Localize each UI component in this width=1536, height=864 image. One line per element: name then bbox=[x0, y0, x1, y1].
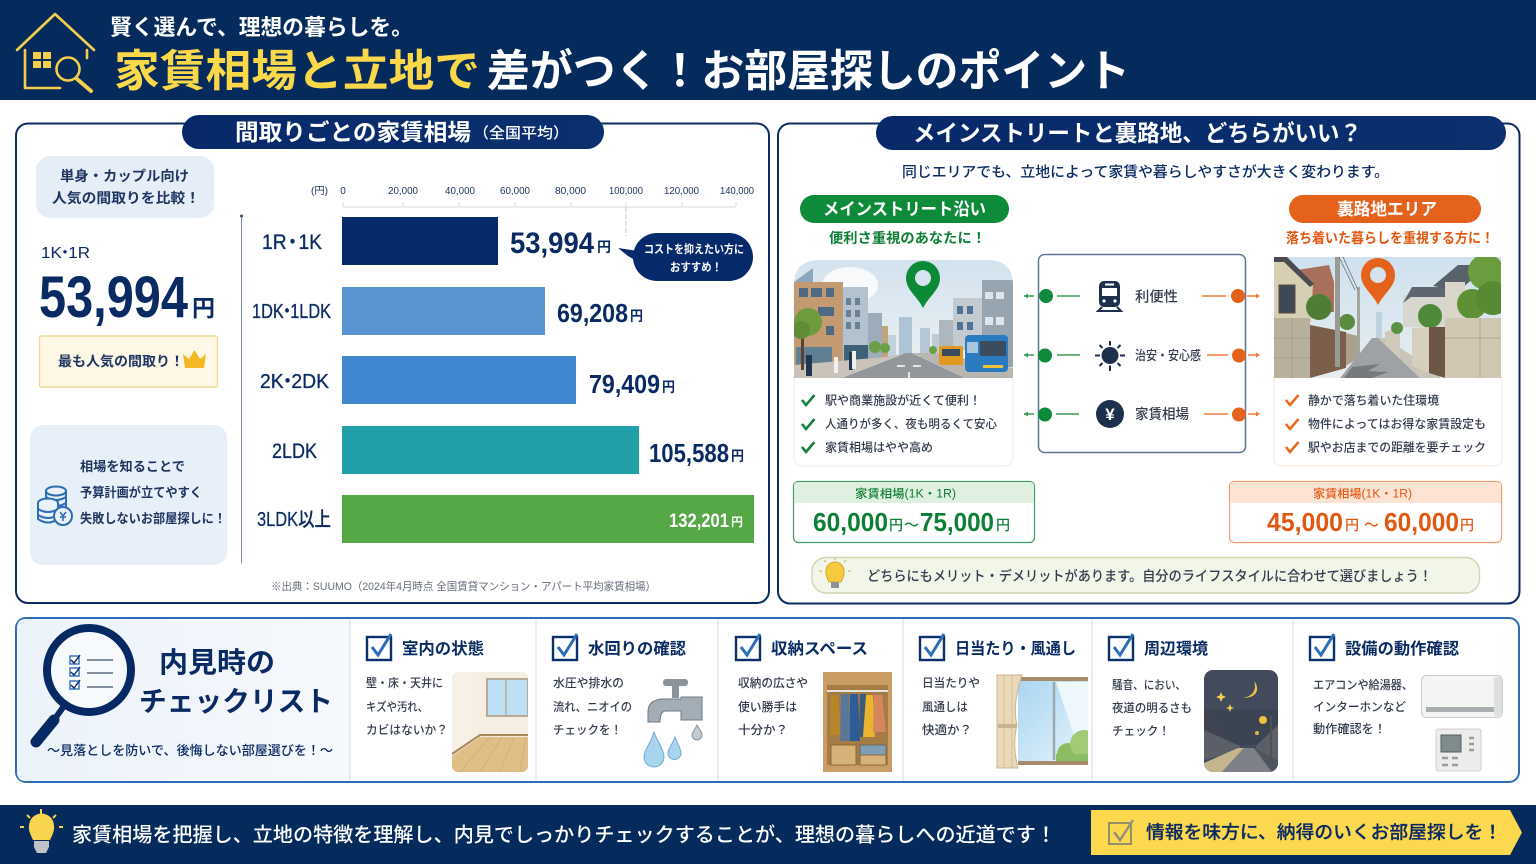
item: surroundings: チェック！ bbox=[1112, 724, 1170, 738]
item: surroundings: 周辺環境 bbox=[1144, 640, 1208, 658]
item: surroundings bbox=[1109, 634, 1278, 772]
row: convenience bbox=[1024, 281, 1260, 311]
checklist title: 内見時の bbox=[159, 647, 275, 678]
rent box: back alley: 円 bbox=[1345, 517, 1359, 533]
item: sunlight and airflow: 日当たり・風通し bbox=[955, 640, 1076, 658]
bar: 1DK・1LDK: 69,208 bbox=[557, 298, 628, 328]
item: water: 水回りの確認 bbox=[588, 639, 686, 658]
item: surroundings: 騒音、におい、 bbox=[1112, 677, 1186, 692]
checklist title: チェックリスト bbox=[139, 686, 333, 717]
icon: crown bbox=[183, 350, 206, 368]
item: water: 水圧や排水の bbox=[553, 675, 624, 690]
label: main street: メインストリート沿い bbox=[823, 200, 986, 219]
bar: 2LDK: 2LDK bbox=[272, 440, 317, 463]
callout: budget note: 相場を知ることで bbox=[80, 459, 185, 474]
rent box: main street: 円 bbox=[996, 517, 1010, 533]
badge: most popular: 最も人気の間取り！ bbox=[58, 353, 184, 369]
list: main street: 人通りが多く、夜も明るくて安心 bbox=[825, 416, 997, 431]
intro text: 同じエリアでも、立地によって家賃や暮らしやすさが大きく変わります。 bbox=[902, 163, 1389, 181]
icon: checkbox bbox=[920, 634, 944, 660]
row: safety: 治安・安心感 bbox=[1135, 348, 1201, 363]
illustration: faucet bbox=[644, 679, 702, 767]
list: back alley: 駅やお店までの距離を要チェック bbox=[1308, 440, 1486, 454]
axis: (円) bbox=[311, 186, 328, 197]
icon: checkbox bbox=[1310, 634, 1334, 660]
callout: recommended for saving cost bbox=[618, 233, 753, 281]
item: storage: 収納の広さや bbox=[738, 675, 808, 690]
item: surroundings: 夜道の明るさも bbox=[1112, 700, 1192, 715]
icon: train bbox=[1098, 281, 1121, 311]
bar: 3LDK以上 bbox=[257, 495, 754, 543]
item: room condition: カビはないか？ bbox=[366, 723, 448, 737]
axis: 140,000 bbox=[720, 186, 754, 197]
item: storage bbox=[736, 634, 892, 772]
card bbox=[1274, 374, 1502, 466]
row: rent: 家賃相場 bbox=[1135, 406, 1189, 422]
main title: 家賃相場と立地で bbox=[114, 47, 480, 96]
panel: rent by floor plan bbox=[16, 115, 769, 603]
checklist intro bbox=[36, 628, 333, 758]
icon: yen coin: ¥ bbox=[1105, 405, 1115, 424]
axis: 80,000 bbox=[555, 186, 586, 197]
banner bbox=[1091, 810, 1522, 855]
item: storage: 収納スペース bbox=[771, 640, 868, 658]
item: room condition: キズや汚れ、 bbox=[366, 699, 428, 714]
item: water: チェックを！ bbox=[553, 723, 622, 737]
item: equipment check bbox=[1310, 634, 1502, 771]
bar: 1R・1K: 53,994 bbox=[510, 227, 594, 260]
highlighted figure: 円 bbox=[192, 295, 215, 321]
illustration: closet bbox=[823, 672, 892, 772]
bar: 1DK・1LDK: 1DK・1LDK bbox=[252, 301, 332, 323]
checklist tagline: ～見落としを防いで、後悔しない部屋選びを！～ bbox=[47, 743, 333, 758]
callout: compare popular layouts: 人気の間取りを比較！ bbox=[52, 190, 200, 206]
item: equipment check: 動作確認を！ bbox=[1313, 721, 1386, 736]
panel heading bbox=[182, 115, 604, 149]
item: room condition: 壁・床・天井に bbox=[366, 676, 443, 690]
tip bar bbox=[812, 558, 1480, 593]
bar chart bbox=[240, 186, 754, 563]
item: sunlight and airflow: 日当たりや bbox=[922, 676, 980, 690]
comparison table bbox=[1024, 254, 1260, 452]
bar: 2K・2DK: 79,409 bbox=[589, 369, 660, 399]
item: room condition bbox=[366, 634, 528, 772]
item: sunlight and airflow bbox=[920, 634, 1098, 768]
item: sunlight and airflow: 風通しは bbox=[922, 700, 968, 714]
item: water bbox=[553, 634, 702, 767]
callout: recommended for saving cost: おすすめ！ bbox=[670, 261, 722, 274]
label: back alley bbox=[1289, 195, 1481, 223]
conclusion text: 家賃相場を把握し、立地の特徴を理解し、内見でしっかりチェックすることが、理想の暮らしへの近道です！ bbox=[72, 824, 1056, 846]
callout: budget note bbox=[30, 425, 227, 565]
bar: 1R・1K: 1R・1K bbox=[262, 231, 322, 254]
rent box: back alley: ～ bbox=[1364, 517, 1379, 534]
bar: 1DK・1LDK: 円 bbox=[630, 308, 643, 324]
illustration: quiet alley bbox=[1274, 254, 1510, 378]
axis: 120,000 bbox=[664, 186, 699, 197]
source note: ※出典：SUUMO（2024年4月時点 全国賃貸マンション・アパート平均家賃相場） bbox=[271, 579, 656, 593]
subheading: 落ち着いた暮らしを重視する方に！ bbox=[1286, 230, 1494, 246]
bar: 1R・1K: 円 bbox=[597, 239, 611, 255]
badge: most popular bbox=[40, 336, 218, 387]
label: main street bbox=[800, 195, 1009, 223]
icon: checkbox bbox=[367, 634, 391, 660]
row: rent bbox=[1024, 400, 1260, 428]
bar: 2K・2DK bbox=[260, 356, 675, 404]
item: room condition: 室内の状態 bbox=[402, 639, 484, 658]
panel: main street vs back alley bbox=[778, 116, 1520, 604]
rent box: main street: 75,000 bbox=[920, 507, 994, 537]
rent box: back alley: 家賃相場(1K・1R) bbox=[1313, 486, 1412, 500]
item: sunlight and airflow: 快適か？ bbox=[922, 722, 972, 737]
panel heading: メインストリートと裏路地、どちらがいい？ bbox=[913, 120, 1362, 146]
callout: compare popular layouts: 単身・カップル向け bbox=[60, 168, 189, 184]
icon: magnifier with list bbox=[36, 628, 131, 742]
callout: budget note: 予算計画が立てやすく bbox=[80, 485, 202, 500]
item: storage: 使い勝手は bbox=[738, 699, 797, 714]
panel: viewing checklist bbox=[16, 618, 1519, 782]
list: main street: 駅や商業施設が近くて便利！ bbox=[825, 392, 981, 408]
callout: compare popular layouts bbox=[36, 156, 214, 218]
icon: light bulb bbox=[819, 558, 851, 588]
list: main street: 家賃相場はやや高め bbox=[825, 440, 933, 454]
header band bbox=[0, 0, 1536, 100]
axis: 100,000 bbox=[609, 186, 643, 197]
label: back alley: 裏路地エリア bbox=[1337, 199, 1437, 219]
illustration: intercom panel bbox=[1436, 729, 1481, 771]
column: main street bbox=[792, 195, 1034, 542]
list: back alley bbox=[1286, 392, 1486, 454]
row: safety bbox=[1024, 341, 1260, 371]
icon: checkbox bbox=[1109, 634, 1133, 660]
icon: coins bbox=[38, 486, 72, 525]
axis: 60,000 bbox=[500, 186, 530, 197]
rent box: back alley: 円 bbox=[1460, 517, 1474, 533]
tip bar: どちらにもメリット・デメリットがあります。自分のライフスタイルに合わせて選びましょう！ bbox=[867, 568, 1432, 584]
panel heading: 間取りごとの家賃相場 bbox=[235, 119, 471, 145]
axis: 0 bbox=[340, 186, 346, 197]
callout: budget note: 失敗しないお部屋探しに！ bbox=[80, 511, 226, 526]
rent box: main street: 60,000 bbox=[813, 507, 888, 537]
list: back alley: 静かで落ち着いた住環境 bbox=[1308, 392, 1439, 408]
icon: light bulb bbox=[20, 809, 63, 853]
list: back alley: 物件によってはお得な家賃設定も bbox=[1308, 416, 1486, 431]
bar: 2LDK bbox=[272, 426, 744, 474]
rent box: back alley bbox=[1230, 482, 1502, 542]
illustration: night road bbox=[1204, 670, 1278, 772]
item: equipment check: インターホンなど bbox=[1313, 700, 1406, 714]
bar: 3LDK以上: 円 bbox=[731, 515, 743, 529]
icon: house with magnifier bbox=[17, 14, 94, 91]
rent box: back alley: 60,000 bbox=[1384, 507, 1459, 537]
icon: orange map pin bbox=[1361, 258, 1395, 305]
rent box: main street: ～ bbox=[904, 517, 919, 534]
icon: yen coin bbox=[1096, 400, 1124, 428]
row: convenience: 利便性 bbox=[1135, 288, 1178, 304]
icon: green map pin bbox=[906, 261, 940, 308]
item: storage: 十分か？ bbox=[738, 722, 788, 737]
callout: recommended for saving cost: コストを抑えたい方に bbox=[644, 242, 744, 256]
bar: 2LDK: 円 bbox=[731, 448, 744, 464]
column: back alley bbox=[1230, 195, 1510, 542]
banner: 情報を味方に、納得のいくお部屋探しを！ bbox=[1146, 822, 1502, 842]
illustration: busy street bbox=[792, 260, 1013, 378]
axis: 40,000 bbox=[445, 186, 475, 197]
subheading: 便利さ重視のあなたに！ bbox=[829, 230, 986, 246]
axis: 20,000 bbox=[388, 186, 418, 197]
footer band bbox=[0, 805, 1536, 864]
item: equipment check: 設備の動作確認 bbox=[1345, 639, 1459, 658]
bar: 1DK・1LDK bbox=[252, 287, 643, 335]
bar: 2LDK: 105,588 bbox=[649, 438, 729, 468]
highlighted figure: 53,994 bbox=[39, 265, 188, 330]
icon: sun bbox=[1095, 341, 1125, 371]
rent box: main street: 円 bbox=[889, 517, 903, 533]
bar: 1R・1K bbox=[262, 217, 611, 265]
card bbox=[794, 372, 1013, 466]
rent box: main street: 家賃相場(1K・1R) bbox=[855, 486, 956, 500]
item: equipment check: エアコンや給湯器、 bbox=[1313, 677, 1413, 692]
axis bbox=[311, 186, 754, 236]
panel heading: （全国平均） bbox=[473, 125, 569, 142]
highlighted figure: 1K・1R bbox=[41, 245, 90, 262]
icon: checkbox bbox=[736, 634, 760, 660]
icon: checkbox bbox=[1109, 820, 1133, 844]
bar: 3LDK以上: 3LDK以上 bbox=[257, 508, 331, 531]
icon: checkbox bbox=[553, 634, 577, 660]
rent box: back alley: 45,000 bbox=[1267, 507, 1343, 537]
illustration: window and curtain bbox=[997, 675, 1098, 768]
main title: 差がつく！お部屋探しのポイント bbox=[487, 47, 1130, 96]
bar: 2K・2DK: 2K・2DK bbox=[260, 371, 330, 393]
panel heading bbox=[876, 116, 1506, 150]
main title bbox=[114, 47, 1130, 96]
bar: 2K・2DK: 円 bbox=[662, 379, 675, 395]
list: main street bbox=[802, 392, 997, 454]
rent box: main street bbox=[794, 482, 1034, 542]
bar: 3LDK以上: 132,201 bbox=[669, 511, 729, 532]
item: water: 流れ、ニオイの bbox=[553, 700, 632, 714]
illustration: air conditioner bbox=[1422, 676, 1502, 718]
subtitle: 賢く選んで、理想の暮らしを。 bbox=[110, 15, 413, 40]
illustration: room bbox=[452, 672, 528, 772]
checklist title bbox=[139, 647, 333, 717]
